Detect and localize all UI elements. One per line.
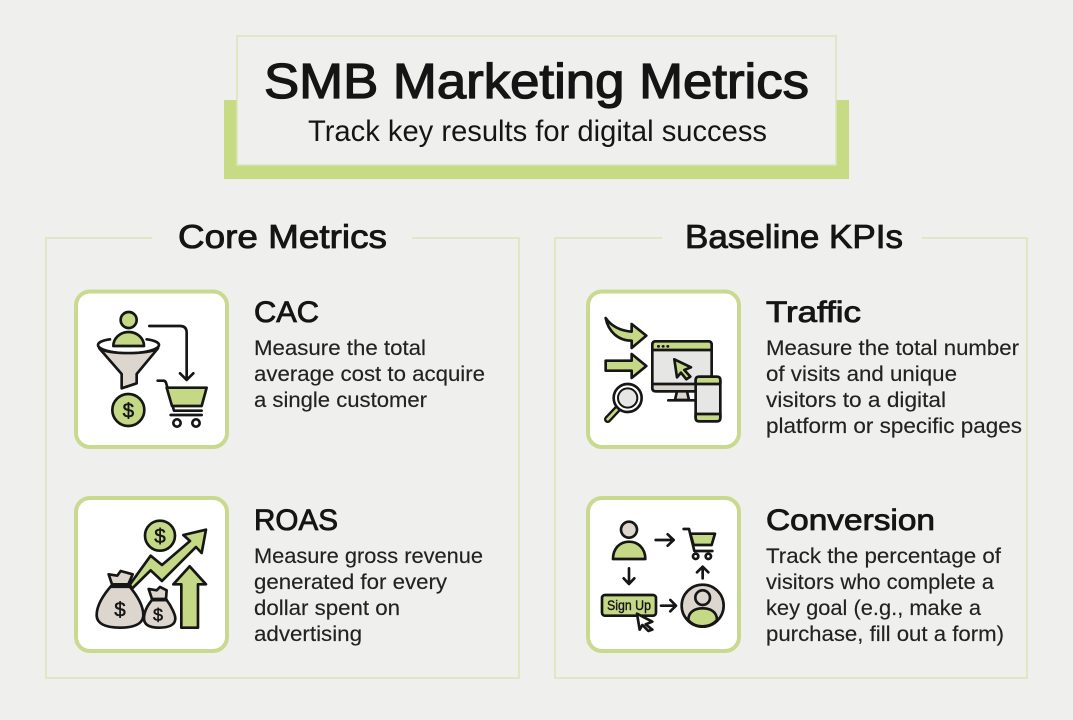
text: Traffic [766, 296, 1022, 438]
text: CAC: Measure the total [254, 337, 426, 360]
text: Traffic: Traffic [766, 296, 861, 329]
text: CAC [254, 296, 485, 412]
text: CAC: a single customer [254, 389, 427, 412]
text: ROAS: Measure gross revenue [254, 545, 483, 568]
card: CAC icon [76, 292, 227, 447]
header green backing block [224, 100, 849, 179]
panel: Baseline KPIs [555, 218, 1027, 678]
icon: money bags, growth arrows and coin: $ [153, 605, 163, 625]
header banner [224, 36, 849, 179]
icon: conversion flow from visitor to sign up to customer to cart: Sign Up [607, 597, 651, 613]
icon: money bags, growth arrows and coin: $ [114, 599, 126, 622]
heading: Baseline KPIs: Baseline KPIs [685, 218, 903, 255]
text: ROAS: dollar spent on [254, 597, 400, 620]
text: Conversion: Conversion [766, 504, 935, 537]
text: Conversion: purchase, fill out a form) [766, 623, 1004, 646]
text: Conversion: key goal (e.g., make a [766, 597, 981, 620]
icon: traffic arrows, search, monitor and phone [606, 318, 720, 421]
panel frame [555, 238, 1027, 678]
text: ROAS: advertising [254, 623, 362, 646]
text: Traffic: platform or specific pages [766, 415, 1022, 438]
text: Traffic: of visits and unique [766, 363, 957, 386]
panel frame [46, 238, 519, 678]
text: ROAS: ROAS [254, 504, 338, 537]
icon: money bags, growth arrows and coin [97, 521, 206, 628]
title: SMB Marketing Metrics [264, 55, 809, 109]
card: ROAS icon [76, 498, 227, 651]
card: Traffic icon [588, 292, 739, 447]
text: Conversion: visitors who complete a [766, 571, 994, 594]
heading: Core Metrics: Core Metrics [178, 218, 387, 255]
text: Traffic: Measure the total number [766, 337, 1019, 360]
header box [237, 36, 836, 165]
text: CAC: CAC [254, 296, 319, 329]
icon: money bags, growth arrows and coin: $ [154, 525, 166, 548]
text: Traffic: visitors to a digital [766, 389, 946, 412]
subtitle: Track key results for digital success [308, 115, 767, 148]
text: Conversion: Track the percentage of [766, 545, 1001, 568]
panel: Core Metrics [46, 218, 519, 678]
text: ROAS [254, 504, 483, 646]
text: CAC: average cost to acquire [254, 363, 485, 386]
icon: funnel with person, arrow, cart and dollar: $ [123, 399, 135, 422]
card: Conversion icon [588, 498, 739, 651]
text: ROAS: generated for every [254, 571, 448, 594]
text: Conversion [766, 504, 1004, 646]
